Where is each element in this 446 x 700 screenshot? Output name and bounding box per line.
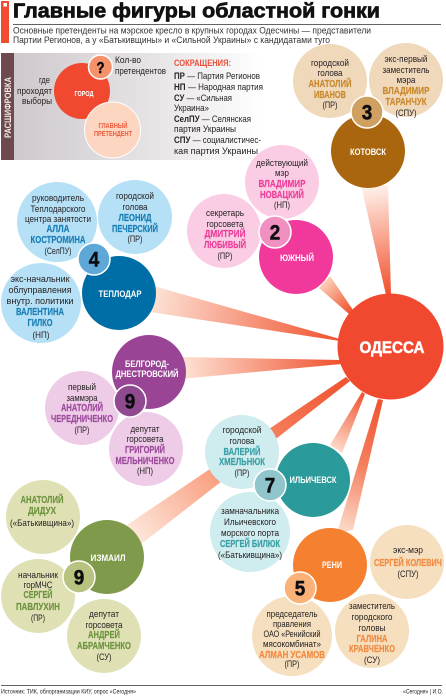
- candidate: Grigory Melnichenko: депутат: [130, 424, 160, 435]
- count badge: 9: [114, 385, 146, 417]
- candidate: Grigory Melnichenko: [109, 412, 183, 486]
- legend: where elections take place: выборы: [22, 96, 52, 107]
- subtitle: Основные претенденты на мэрское кресло в крупных городах Одесчины — представители: [13, 26, 371, 36]
- candidate: Dmitry Lyubivy: секретарь: [206, 208, 244, 219]
- city circle: Reni: [293, 528, 367, 602]
- count badge: 7: 7: [265, 474, 275, 498]
- count badge: 5: 5: [295, 578, 306, 600]
- candidate: Dmitry Lyubivy: [187, 194, 261, 268]
- legend: city circle: ГОРОД: [74, 91, 94, 98]
- candidate: Alla Kostromina: Теплодарского: [30, 204, 86, 215]
- candidate: Sergey Bilyuk: («Батькивщина»): [218, 550, 282, 561]
- candidate: Leonid Pechersky: ЛЕОНИД: [118, 213, 152, 224]
- legend: count circle: ?: [96, 60, 104, 77]
- candidate: Grigory Melnichenko: МЕЛЬНИЧЕНКО: [116, 456, 175, 467]
- cluster: Kotovsk: [293, 43, 443, 188]
- count badge: 2: 2: [270, 222, 280, 244]
- legend: abbreviations: НП — Народная партия: [174, 82, 263, 93]
- count badge: 3: [351, 96, 383, 128]
- cluster: Izmail: [1, 480, 144, 673]
- legend: abbreviations: кая партия Украины: [174, 146, 258, 157]
- candidate: Vladimir Novatsky: (НП): [274, 200, 290, 211]
- candidate: Galina Kravchenko: городского: [352, 612, 392, 623]
- candidate: Andrey Abramchenko: депутат: [89, 609, 120, 620]
- candidate: Vladimir Novatsky: НОВАЦКИЙ: [260, 188, 304, 201]
- candidate: Valentina Gilko: ВАЛЕНТИНА: [16, 307, 64, 318]
- candidate: Alla Kostromina: руководитель: [32, 193, 84, 204]
- legend: count circle: [88, 55, 112, 79]
- candidate: Alla Kostromina: (СелПУ): [44, 246, 72, 257]
- candidate: Alla Kostromina: АЛЛА: [46, 224, 70, 235]
- cluster: Belgorod-Dnestrovsky: [45, 335, 186, 486]
- candidate: Anatoly Didukh: ДИДУХ: [28, 506, 56, 517]
- candidate: Sergey Pavlukhin: горМЧС: [24, 580, 53, 591]
- candidate: Andrey Abramchenko: горсовета: [86, 620, 123, 631]
- candidate: Valentina Gilko: [1, 263, 81, 343]
- candidate: Anatoly Cherednichenko: заммэра: [66, 393, 98, 404]
- legend: main candidate circle: ПРЕТЕНДЕНТ: [94, 131, 133, 138]
- candidate: Anatoly Didukh: [6, 480, 80, 554]
- candidate: Alla Kostromina: [17, 182, 97, 262]
- city circle: Kotovsk: [331, 114, 405, 188]
- hub: Odessa: [338, 294, 444, 400]
- candidate: Sergey Bilyuk: замначальника: [221, 506, 280, 517]
- city circle: Belgorod-Dnestrovsky: [112, 335, 186, 409]
- legend heading: РАСШИФРОВКА: [3, 77, 13, 138]
- candidate: Valery Khmelnyuk: голова: [230, 436, 255, 447]
- candidate: Grigory Melnichenko: горсовета: [126, 434, 164, 445]
- candidate: Anatoly Cherednichenko: АНАТОЛИЙ: [61, 401, 103, 414]
- candidate: Alman Usamov: правления: [273, 619, 311, 630]
- hub: Odessa: ОДЕССА: [360, 338, 424, 357]
- candidate: Anatoly Cherednichenko: ЧЕРЕДНИЧЕНКО: [51, 414, 113, 425]
- city circle: Ilyichevsk: [276, 443, 350, 517]
- count badge: 9: 9: [74, 566, 84, 590]
- candidate: Alla Kostromina: КОСТРОМИНА: [30, 235, 86, 246]
- candidate: Vladimir Taranchuk: мэра: [396, 75, 416, 86]
- candidate: Galina Kravchenko: КРАВЧЕНКО: [349, 644, 395, 655]
- candidate: Sergey Kolevich: [370, 525, 444, 599]
- candidate: Anatoly Didukh: АНАТОЛИЙ: [20, 493, 64, 506]
- cluster: Teplodar: [1, 180, 172, 343]
- candidate: Dmitry Lyubivy: ДМИТРИЙ: [204, 227, 246, 240]
- candidate: Sergey Bilyuk: Ильичевского: [224, 517, 276, 528]
- candidate: Anatoly Ivanov: АНАТОЛИЙ: [308, 77, 352, 90]
- city label: Teplodar: ТЕПЛОДАР: [98, 289, 142, 299]
- candidate: Sergey Bilyuk: СЕРГЕЙ БИЛЮК: [220, 537, 281, 550]
- candidate: Alman Usamov: председатель: [266, 609, 318, 620]
- candidate: Sergey Pavlukhin: [1, 559, 75, 633]
- legend: abbreviations: партия Украины: [174, 124, 236, 135]
- cluster: Yuzhny: [187, 145, 333, 294]
- candidate: Sergey Pavlukhin: (ПР): [31, 613, 45, 624]
- candidate: Alman Usamov: [252, 596, 332, 676]
- count badge: 9: [63, 561, 95, 593]
- legend: number of candidates: претендентов: [115, 66, 166, 77]
- city label: Belgorod-Dnestrovsky: БЕЛГОРОД-: [125, 359, 169, 369]
- candidate: Vladimir Novatsky: ВЛАДИМИР: [258, 179, 306, 190]
- candidate: Sergey Bilyuk: морского порта: [221, 528, 280, 539]
- candidate: Anatoly Ivanov: (ПР): [322, 100, 338, 111]
- candidate: Leonid Pechersky: [98, 180, 172, 254]
- candidate: Galina Kravchenko: (СУ): [364, 655, 380, 666]
- candidate: Valentina Gilko: внутр. политики: [6, 296, 74, 307]
- count badge: 2: [259, 216, 291, 248]
- candidate: Anatoly Cherednichenko: [45, 371, 119, 445]
- candidate: Dmitry Lyubivy: горсовета: [206, 219, 244, 230]
- candidate: Vladimir Taranchuk: [369, 43, 443, 119]
- candidate: Leonid Pechersky: ПЕЧЕРСКИЙ: [112, 222, 158, 235]
- candidate: Grigory Melnichenko: (НП): [137, 466, 153, 477]
- legend: abbreviations: Украина»: [174, 103, 209, 114]
- candidate: Andrey Abramchenko: АБРАМЧЕНКО: [77, 641, 131, 652]
- city label: Kotovsk: КОТОВСК: [350, 147, 386, 157]
- candidate: Valentina Gilko: (НП): [32, 330, 50, 341]
- cluster: Reni: [252, 525, 444, 676]
- city label: Izmail: ИЗМАИЛ: [90, 553, 126, 563]
- subtitle: [13, 26, 371, 45]
- city label: Belgorod-Dnestrovsky: ДНЕСТРОВСКИЙ: [116, 368, 178, 379]
- candidate: Valery Khmelnyuk: городской: [222, 425, 262, 436]
- legend: abbreviations: СПУ — социалистичес-: [174, 135, 261, 146]
- candidate: Valentina Gilko: облуправления: [8, 285, 72, 296]
- candidate: Valery Khmelnyuk: (ПР): [234, 468, 250, 479]
- candidate: Alman Usamov: (ПР): [284, 659, 300, 670]
- panel: legend: [1, 53, 263, 160]
- candidate: Valery Khmelnyuk: ВАЛЕРИЙ: [224, 445, 260, 458]
- candidate: Sergey Pavlukhin: начальник: [18, 570, 59, 581]
- candidate: Valentina Gilko: ГИЛКО: [28, 318, 53, 329]
- candidate: Vladimir Taranchuk: заместитель: [382, 65, 430, 76]
- city label: Ilyichevsk: ИЛЬИЧЕВСК: [290, 475, 337, 485]
- candidate: Anatoly Ivanov: голова: [318, 68, 343, 79]
- candidate: Alman Usamov: мясокомбинат»: [263, 639, 321, 650]
- legend: abbreviations: СОКРАЩЕНИЯ:: [174, 58, 231, 69]
- candidate: Dmitry Lyubivy: (ПР): [218, 251, 232, 262]
- candidate: Galina Kravchenko: ГАЛИНА: [356, 634, 388, 645]
- candidate: Leonid Pechersky: голова: [122, 202, 148, 213]
- candidate: Galina Kravchenko: головы: [358, 623, 386, 634]
- city circle: Izmail: [70, 520, 144, 594]
- count badge: 9: 9: [125, 390, 135, 414]
- candidate: Vladimir Taranchuk: экс-первый: [384, 54, 428, 65]
- candidate: Alman Usamov: ОАО «Ренийский: [264, 629, 320, 640]
- source note: Источник: ТИК, облорганизации КИУ, опрос «Сегодня»: [1, 688, 136, 696]
- count badge: 5: [284, 572, 316, 604]
- title: Главные фигуры областной гонки: [13, 0, 380, 22]
- candidate: Galina Kravchenko: [335, 594, 409, 668]
- legend: main candidate circle: [84, 102, 140, 158]
- city label: Reni: РЕНИ: [322, 560, 342, 570]
- cluster: Ilyichevsk: [205, 415, 350, 572]
- candidate: Vladimir Novatsky: [245, 145, 319, 219]
- candidate: Andrey Abramchenko: (СУ): [96, 652, 112, 663]
- legend: abbreviations: [174, 58, 263, 157]
- city circle: Teplodar: [82, 256, 156, 330]
- candidate: Valentina Gilko: экс-начальник: [10, 274, 70, 285]
- legend: number of candidates: [115, 55, 166, 77]
- legend: main candidate circle: ГЛАВНЫЙ: [98, 121, 128, 130]
- legend: abbreviations: ПР — Партия Регионов: [174, 71, 260, 82]
- candidate: Leonid Pechersky: (ПР): [128, 234, 142, 245]
- legend: where elections take place: проходят: [17, 86, 53, 97]
- candidate: Vladimir Novatsky: действующий: [256, 158, 308, 169]
- candidate: Valery Khmelnyuk: ХМЕЛЬНЮК: [219, 457, 266, 468]
- candidate: Sergey Pavlukhin: СЕРГЕЙ: [24, 588, 52, 601]
- title bar: red marker: [1, 1, 9, 43]
- candidate: Anatoly Ivanov: городской: [311, 58, 349, 69]
- city label: Belgorod-Dnestrovsky: [116, 359, 178, 379]
- candidate: Vladimir Novatsky: мэр: [275, 168, 289, 179]
- legend: city circle: [54, 63, 110, 119]
- candidate: Vladimir Taranchuk: ТАРАНЧУК: [386, 97, 427, 108]
- candidate: Andrey Abramchenko: АНДРЕЙ: [88, 628, 120, 641]
- subtitle: Партии Регионов, а у «Батькивщины» и «Сильной Украины» с кандидатами туго: [13, 35, 330, 45]
- candidate: Sergey Kolevich: экс-мэр: [393, 545, 423, 556]
- candidate: Alman Usamov: АЛМАН УСАМОВ: [259, 650, 325, 661]
- city label: Yuzhny: ЮЖНЫЙ: [280, 252, 314, 263]
- legend: abbreviations: СУ — «Сильная: [174, 93, 232, 104]
- count badge: 7: [254, 469, 286, 501]
- candidate: Vladimir Taranchuk: (СПУ): [396, 108, 416, 119]
- candidate: Sergey Pavlukhin: ПАВЛУХИН: [16, 602, 60, 613]
- candidate: Leonid Pechersky: городской: [116, 191, 154, 202]
- legend: number of candidates: Кол-во: [115, 55, 141, 66]
- legend: abbreviations: СелПУ — Селянская: [174, 114, 251, 125]
- candidate: Valery Khmelnyuk: [205, 415, 279, 489]
- count badge: 4: 4: [89, 248, 100, 272]
- candidate: Galina Kravchenko: заместитель: [349, 601, 395, 612]
- count badge: 4: [78, 243, 110, 275]
- count badge: 3: 3: [362, 102, 372, 124]
- candidate: Anatoly Ivanov: ИВАНОВ: [314, 90, 346, 101]
- candidate: Sergey Kolevich: (СПУ): [398, 569, 418, 580]
- candidate: Dmitry Lyubivy: ЛЮБИВЫЙ: [204, 238, 246, 251]
- candidate: Anatoly Didukh: («Батькивщина»): [10, 518, 74, 529]
- candidate: Sergey Bilyuk: [210, 492, 290, 572]
- legend: where elections take place: [17, 75, 53, 107]
- candidate: Vladimir Taranchuk: ВЛАДИМИР: [382, 86, 430, 97]
- city circle: Yuzhny: [259, 220, 333, 294]
- candidate: Anatoly Ivanov: [293, 44, 367, 118]
- legend: where elections take place: где: [39, 75, 50, 86]
- candidate: Andrey Abramchenko: [67, 599, 141, 673]
- candidate: Anatoly Cherednichenko: (ПР): [74, 425, 90, 436]
- candidate: Alla Kostromina: центра занятости: [25, 214, 91, 225]
- candidate: Grigory Melnichenko: ГРИГОРИЙ: [125, 443, 165, 456]
- connector rays to Odessa: [127, 185, 391, 545]
- candidate: Anatoly Cherednichenko: первый: [68, 382, 96, 393]
